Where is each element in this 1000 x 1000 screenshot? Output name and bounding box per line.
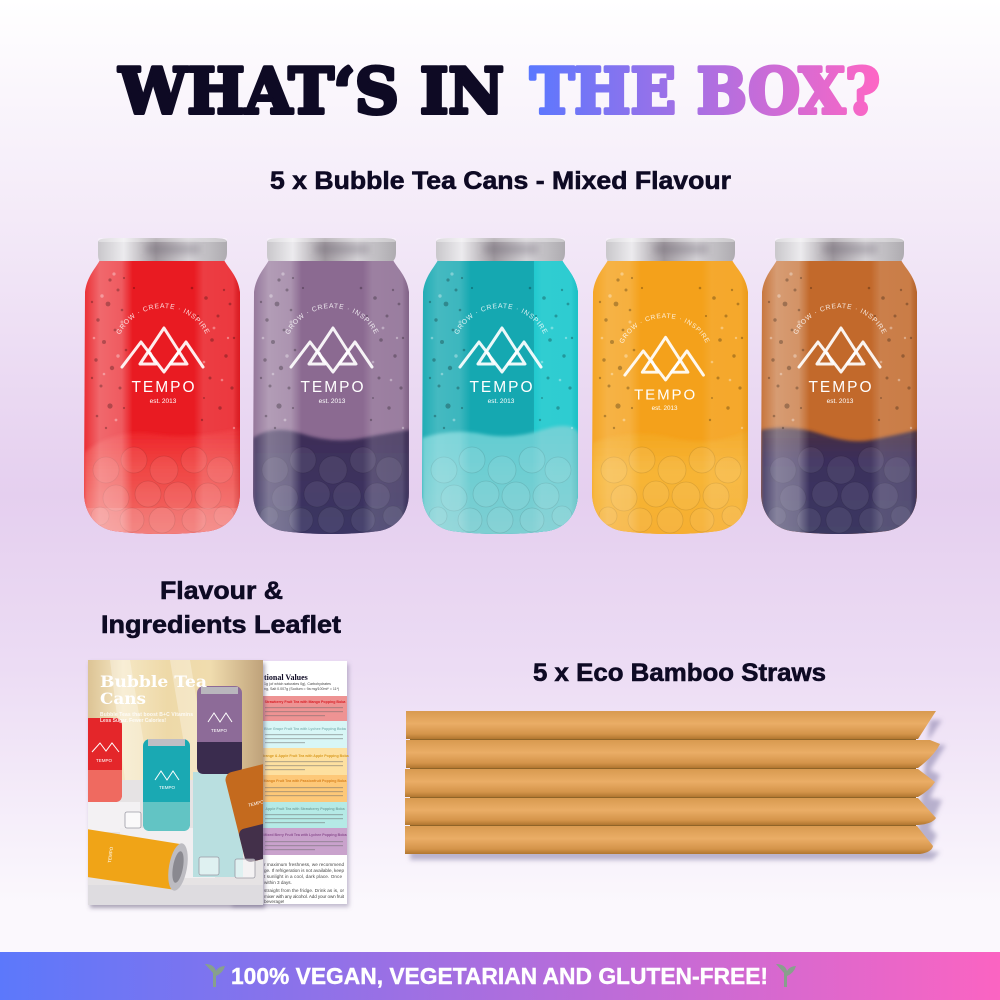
straw shadow — [410, 720, 946, 860]
logo: GROW · CREATE · INSPIRE — [454, 303, 548, 334]
storage and serving notes: beverage! — [264, 899, 284, 904]
logo: GROW · CREATE · INSPIRE — [116, 303, 210, 334]
logo: TEMPO — [634, 386, 695, 403]
cover can: teal: TEMPO — [159, 785, 175, 790]
heading: leaflet — [101, 577, 342, 639]
leaflet back page: Orange & Apple Fruit Tea with Apple Popping Boba — [261, 754, 350, 758]
can: purple — [253, 238, 409, 534]
title — [118, 54, 880, 128]
cover can: purple — [197, 686, 242, 774]
storage and serving notes: r maximum freshness, we recommend — [264, 862, 344, 867]
storage and serving notes: mixer with any alcohol. Add your own fruit — [264, 894, 345, 899]
footer text: 100% VEGAN, VEGETARIAN AND GLUTEN-FREE! — [231, 963, 768, 989]
cover can: red — [88, 718, 122, 802]
heading: leaflet: Ingredients Leaflet — [101, 611, 342, 639]
leaflet — [80, 660, 350, 908]
leaflet back page: Mixed Berry Fruit Tea with Lychee Popping Boba — [263, 833, 348, 837]
cover subtitle: Bubble Teas that boost B+C Vitamins — [100, 712, 193, 718]
logo: TEMPO — [300, 379, 364, 396]
straw seams — [410, 725, 916, 840]
cover can: purple: TEMPO — [211, 728, 227, 733]
storage and serving notes: ge. If refrigeration is not available, keep — [264, 868, 344, 873]
can: red — [84, 238, 240, 534]
leaflet back page: Blue Grape Fruit Tea with Lychee Popping Boba — [264, 727, 347, 731]
can lid — [267, 238, 396, 261]
can lid — [436, 238, 565, 261]
footer band — [0, 952, 1000, 1000]
heading: bubble tea cans: 5 x Bubble Tea Cans - Mixed Flavour — [270, 167, 731, 195]
logo — [116, 303, 210, 405]
cover can: red: TEMPO — [96, 758, 112, 763]
logo: est. 2013 — [150, 398, 177, 405]
can body: red liquid — [84, 238, 241, 538]
leaflet back page: tional Values — [264, 673, 308, 682]
straw 5 — [405, 826, 933, 854]
cover title — [100, 675, 207, 704]
logo: GROW · CREATE · INSPIRE — [794, 303, 887, 334]
cover can: orange lying: TEMPO — [107, 846, 114, 863]
leaflet back page: Apple Fruit Tea with Strawberry Popping Boba — [265, 807, 346, 811]
cover can: amber tilted: TEMPO — [248, 799, 265, 808]
bamboo straws — [405, 711, 946, 860]
can: amber brown — [761, 238, 917, 534]
can: teal — [422, 238, 578, 534]
logo: est. 2013 — [319, 398, 346, 405]
cover subtitle — [100, 712, 193, 724]
cover can: teal — [143, 739, 190, 831]
can lid — [98, 238, 227, 261]
storage and serving notes: straight from the fridge. Drink as is, or — [264, 888, 344, 893]
can body: orange liquid — [592, 238, 749, 538]
title: WHAT‘S IN — [118, 54, 504, 128]
can lid — [775, 238, 904, 261]
logo: TEMPO — [132, 379, 194, 396]
leaflet back page: Mango Fruit Tea with Passionfruit Popping Boba — [264, 779, 347, 783]
straw 3 — [405, 769, 935, 797]
logo: TEMPO — [808, 379, 872, 396]
storage and serving notes: t sunlight in a cool, dark place. Once — [264, 874, 342, 879]
logo: est. 2013 — [827, 398, 854, 405]
logo — [794, 303, 887, 405]
cover title: Bubble Tea — [100, 672, 207, 691]
leaflet front cover — [88, 660, 268, 910]
leaflet back page: Strawberry Fruit Tea with Mango Popping Boba — [265, 700, 346, 704]
can: orange — [592, 238, 748, 534]
heading: leaflet: Flavour & — [160, 577, 283, 605]
cover can: orange lying — [88, 829, 188, 891]
cover title: Cans — [100, 689, 146, 708]
logo: TEMPO — [470, 379, 532, 396]
title: THE BOX? — [530, 54, 880, 128]
can body: teal liquid — [422, 238, 579, 538]
cover can: amber tilted — [226, 764, 263, 862]
logo: est. 2013 — [488, 398, 515, 405]
cover subtitle: Less Sugar. Fewer Calories! — [100, 718, 166, 724]
straw 4 — [405, 798, 936, 825]
logo: est. 2013 — [652, 405, 678, 412]
can lid — [606, 238, 735, 261]
heading: straws: 5 x Eco Bamboo Straws — [533, 659, 826, 687]
icon: sprout left — [205, 964, 225, 987]
leaflet back page — [230, 661, 350, 907]
leaflet back page: 1g (of which saturates 0g), Carbohydrates — [264, 682, 331, 686]
logo: GROW · CREATE · INSPIRE — [620, 313, 710, 343]
storage and serving notes: within 3 days. — [264, 880, 292, 885]
ice cubes — [125, 812, 255, 878]
straw 2 — [406, 740, 940, 768]
straw 1 — [406, 711, 936, 739]
can body: amber liquid — [761, 238, 918, 538]
logo — [286, 303, 379, 405]
storage and serving notes — [264, 862, 345, 904]
leaflet back page: ng, Salt 0.007g (Sodium = 9a mg/100ml* = 11*) — [264, 687, 339, 691]
icon: sprout right — [776, 964, 796, 987]
logo — [620, 313, 710, 412]
logo — [454, 303, 548, 405]
can body: purple liquid — [253, 238, 410, 538]
logo: GROW · CREATE · INSPIRE — [286, 303, 379, 334]
